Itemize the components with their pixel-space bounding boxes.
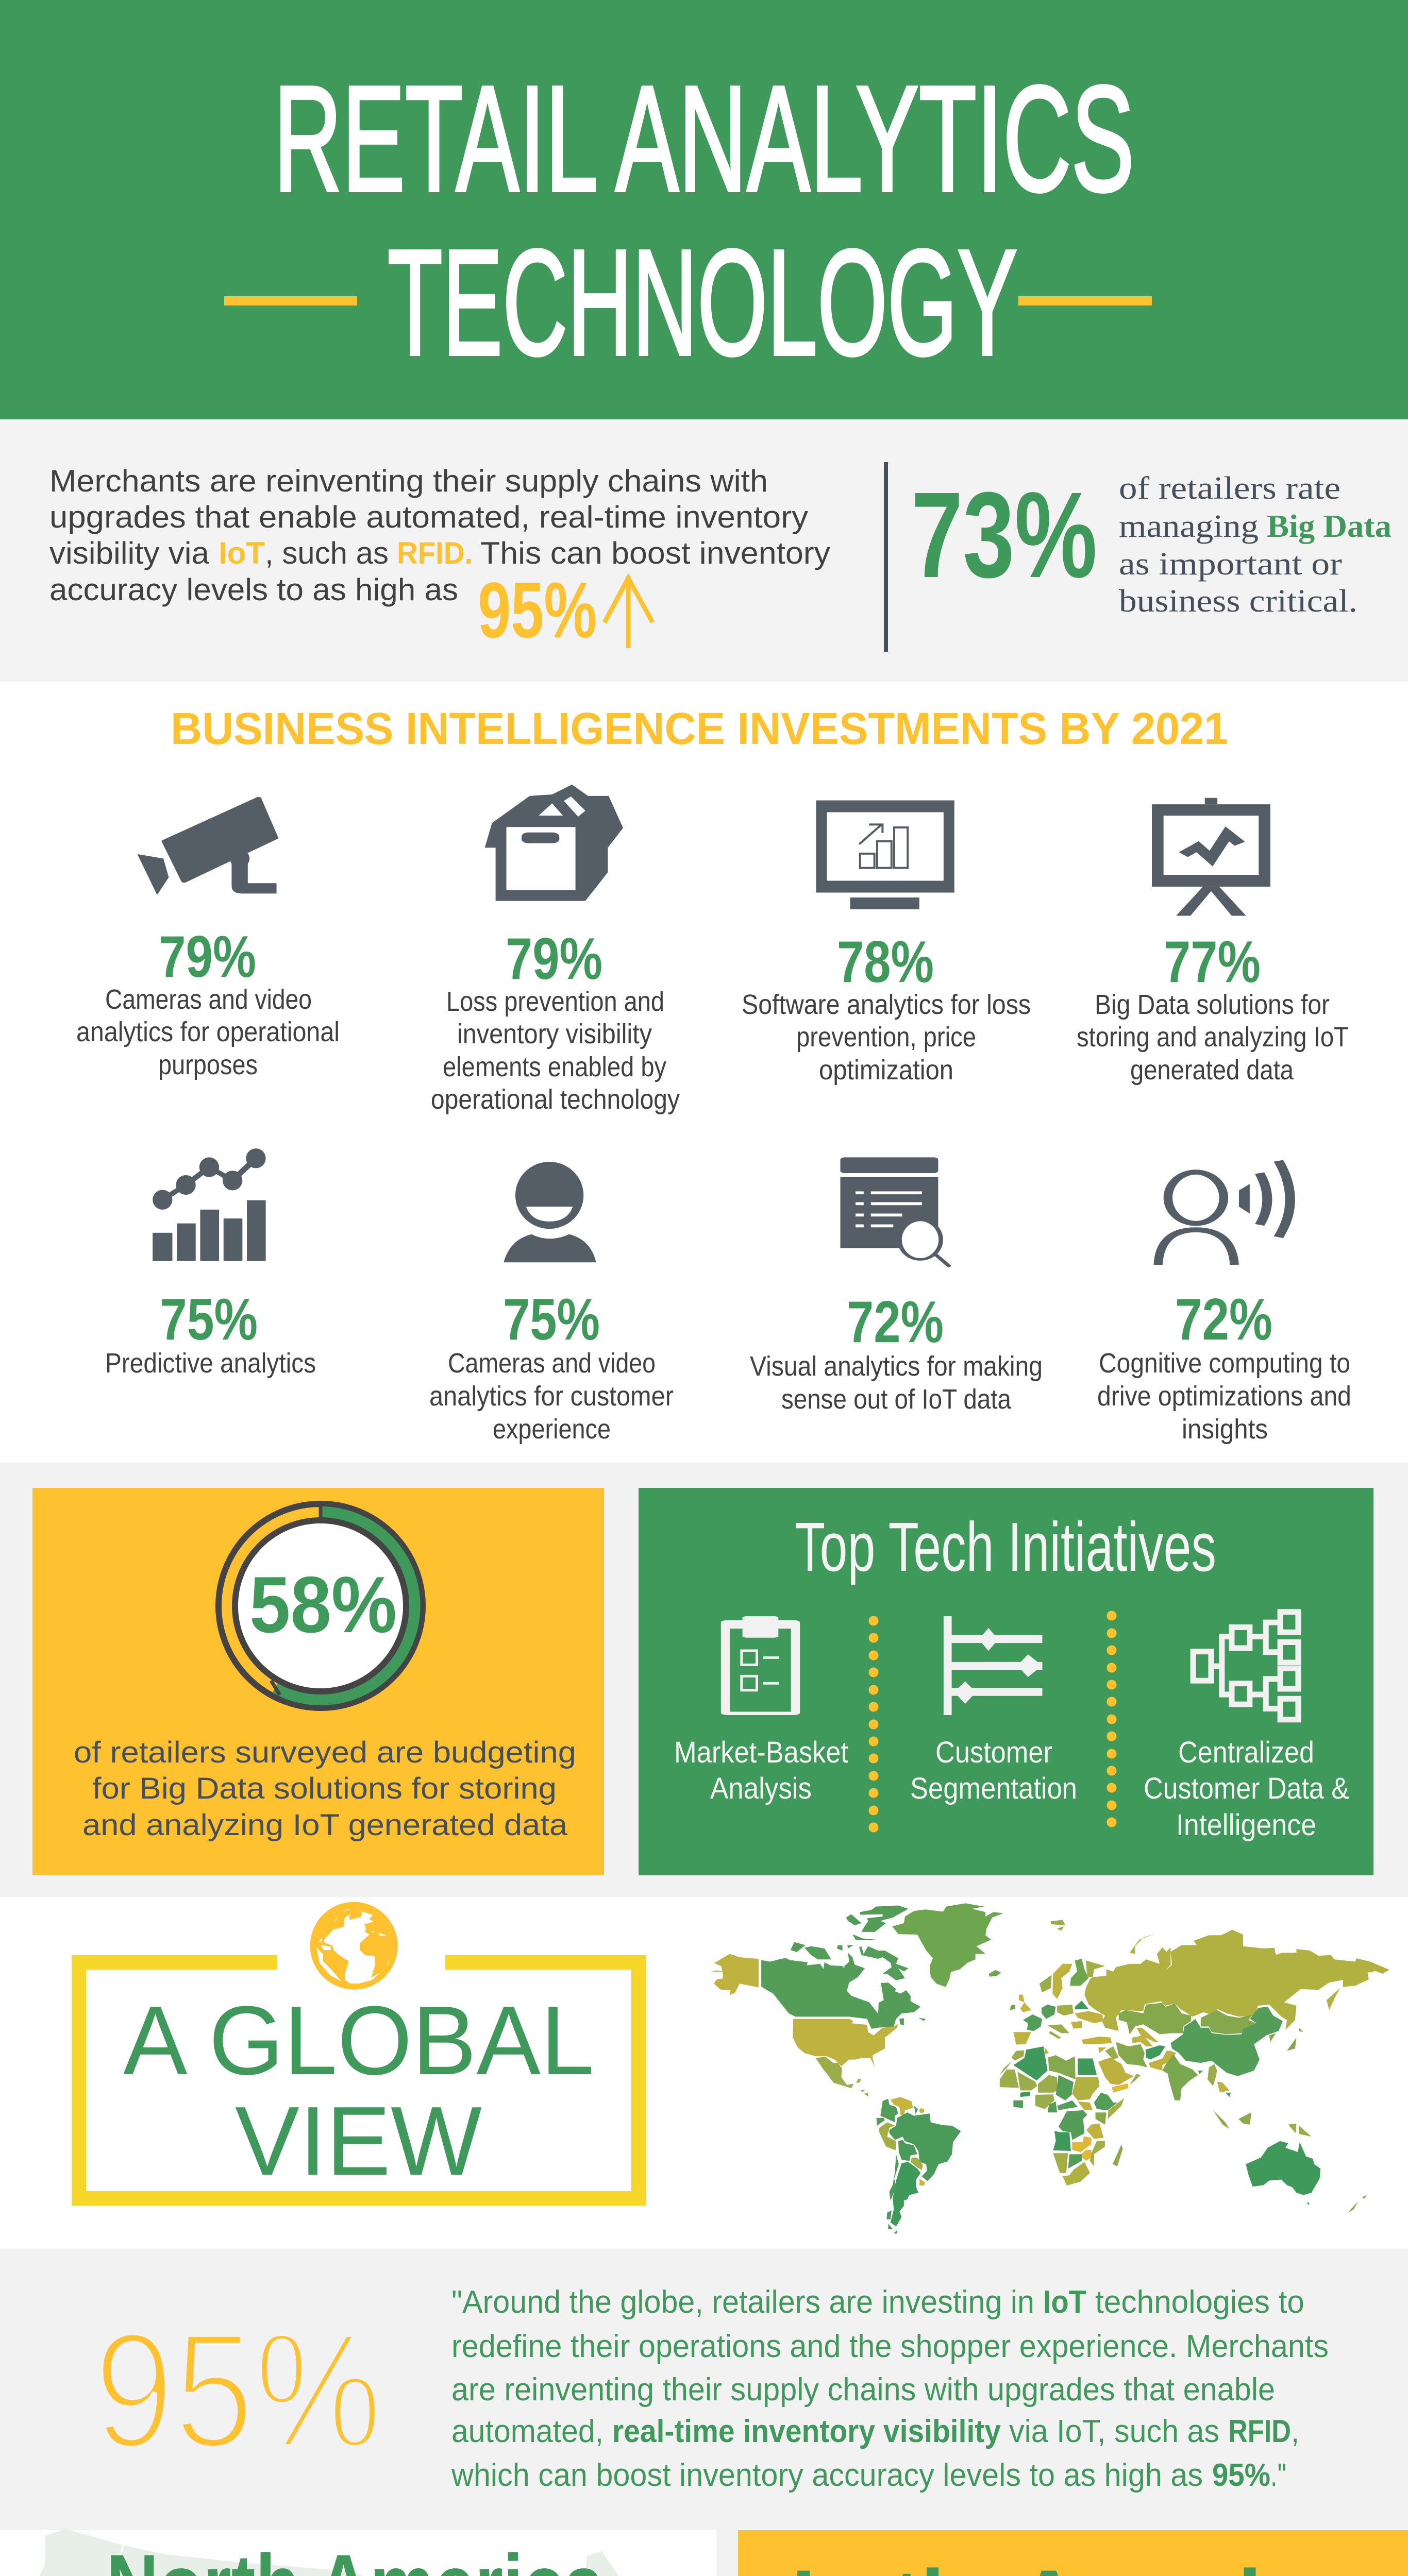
intro text: visibility via <box>49 536 210 570</box>
quote text: real-time inventory visibility <box>612 2414 1001 2449</box>
icon: monitor chart <box>816 801 954 909</box>
label: market-basket <box>674 1736 848 1805</box>
map: eurasia africa oceania <box>989 1920 1389 2213</box>
label: customer segmentation <box>910 1736 1077 1805</box>
intro text: RFID. <box>397 536 473 570</box>
stat 1: Cameras and video <box>105 984 312 1015</box>
quote text: IoT <box>1043 2284 1086 2320</box>
heading: VIEW <box>235 2087 482 2196</box>
big data text: of retailers rate <box>1119 471 1340 506</box>
stat 1: analytics for operational <box>76 1016 340 1047</box>
stat 6: 75% <box>503 1287 600 1352</box>
icon: voice cognition person <box>1158 1161 1290 1265</box>
label: customer segmentation: Segmentation <box>910 1772 1077 1805</box>
budget text: for Big Data solutions for storing <box>92 1772 557 1805</box>
heading: BUSINESS INTELLIGENCE INVESTMENTS BY 2021 <box>171 704 1228 754</box>
icon: up arrow <box>605 576 652 648</box>
intro text: This can boost inventory <box>480 536 830 570</box>
label: market-basket: Analysis <box>710 1772 812 1805</box>
big data text: as important or <box>1119 547 1342 582</box>
stat 6: experience <box>493 1414 611 1445</box>
stat 7 <box>750 1290 1043 1415</box>
label: centralized customer data: Intelligence <box>1176 1808 1316 1842</box>
big data text: Big Data <box>1267 509 1392 544</box>
big data text <box>1119 471 1392 619</box>
quote text: redefine their operations and the shopper experience. Merchants <box>451 2329 1329 2364</box>
icon: sliders <box>944 1616 1042 1715</box>
quote text: which can boost inventory accuracy levels to as high as <box>451 2458 1203 2493</box>
stat 8: Cognitive computing to <box>1099 1348 1350 1379</box>
stat 8: insights <box>1182 1414 1268 1445</box>
stat: 95%: 95% <box>478 566 597 654</box>
stat 4: Big Data solutions for <box>1095 989 1330 1020</box>
stat 3: prevention, price <box>796 1022 976 1053</box>
intro text: , such as <box>265 536 389 570</box>
icon: globe <box>310 1902 398 1990</box>
label: customer segmentation: Customer <box>935 1736 1052 1769</box>
quote text: automated, <box>451 2414 604 2449</box>
icon: presentation easel <box>1152 798 1270 916</box>
map: americas and greenland <box>711 1903 1003 2233</box>
label: centralized customer data: Centralized <box>1178 1736 1314 1769</box>
stat 3: optimization <box>819 1055 953 1086</box>
intro text: Merchants are reinventing their supply chains with <box>49 464 768 498</box>
stat 4 <box>1077 929 1349 1086</box>
title <box>274 55 1134 386</box>
panel: intro statistics <box>0 419 1408 682</box>
panel: a global view <box>0 1897 1408 2249</box>
panel: header <box>0 0 1408 419</box>
intro text: IoT <box>219 536 265 570</box>
big data text: managing <box>1119 509 1259 544</box>
label: market-basket: Market-Basket <box>674 1736 848 1769</box>
label: centralized customer data: Customer Data & <box>1144 1772 1349 1805</box>
panel: 58 percent budgeting <box>32 1488 604 1875</box>
stat 8: 72% <box>1175 1287 1272 1352</box>
panel: top tech initiatives <box>639 1488 1373 1875</box>
budget text: and analyzing IoT generated data <box>82 1808 568 1842</box>
stat: 58%: 58% <box>249 1560 397 1649</box>
stat 1 <box>76 924 340 1080</box>
stat: thin 95%: 95% <box>94 2298 382 2482</box>
yellow frame <box>79 1962 639 2198</box>
stat 7: 72% <box>847 1290 944 1355</box>
panel: north america <box>0 2529 716 2576</box>
stat 3: 78% <box>837 929 934 995</box>
stat 8 <box>1097 1287 1351 1445</box>
stat 1: 79% <box>159 924 256 990</box>
intro text: accuracy levels to as high as <box>49 572 458 607</box>
intro text <box>49 464 830 607</box>
intro text: upgrades that enable automated, real-time inventory <box>49 500 808 534</box>
map: USA background <box>14 2529 622 2576</box>
donut chart <box>219 1504 423 1708</box>
quote text <box>451 2284 1329 2493</box>
stat 2: inventory visibility <box>457 1019 652 1049</box>
quote text: RFID <box>1228 2414 1291 2449</box>
dotted divider 1 <box>869 1616 878 1832</box>
quote text: , <box>1291 2414 1299 2449</box>
quote text: 95% <box>1212 2458 1270 2493</box>
stat 2: Loss prevention and <box>446 986 664 1017</box>
panel: 95 percent quote <box>94 2284 1329 2493</box>
stat 4: 77% <box>1164 929 1261 995</box>
stat 2: 79% <box>506 926 602 992</box>
quote text: are reinventing their supply chains with upgrades that enable <box>451 2372 1275 2408</box>
quote text: technologies to <box>1095 2284 1304 2320</box>
divider <box>884 462 888 652</box>
heading <box>123 1986 594 2196</box>
stat 3 <box>742 929 1031 1086</box>
big data text: business critical. <box>1119 584 1357 619</box>
icon: clipboard <box>721 1616 800 1715</box>
stat 5 <box>105 1287 316 1379</box>
stat 3: Software analytics for loss <box>742 989 1031 1020</box>
icon: box <box>485 785 623 901</box>
stat 4: generated data <box>1130 1055 1294 1086</box>
icon: smiling customer <box>504 1162 596 1262</box>
icon: predictive chart <box>153 1148 266 1261</box>
world map <box>711 1903 1389 2233</box>
stat 2: elements enabled by <box>443 1052 666 1082</box>
yellow dash right <box>1018 296 1152 306</box>
budget text <box>74 1736 576 1842</box>
icon: security camera <box>138 799 277 895</box>
panel: latin america <box>738 2530 1408 2576</box>
stat: 73%: 73% <box>911 467 1097 603</box>
stat 6 <box>429 1287 674 1445</box>
heading: Top Tech Initiatives <box>795 1508 1216 1586</box>
budget text: of retailers surveyed are budgeting <box>74 1736 576 1769</box>
stat 2: operational technology <box>431 1084 680 1115</box>
quote text: ." <box>1270 2458 1286 2493</box>
stat 4: storing and analyzing IoT <box>1077 1022 1349 1053</box>
stat 1: purposes <box>158 1049 258 1080</box>
quote text: via IoT, such as <box>1009 2414 1219 2449</box>
stat 8: drive optimizations and <box>1097 1381 1351 1412</box>
stat 6: Cameras and video <box>448 1348 656 1379</box>
icon: document magnifier <box>841 1157 950 1267</box>
heading: A GLOBAL <box>123 1986 594 2095</box>
stat 2 <box>431 926 680 1115</box>
label: centralized customer data <box>1144 1736 1349 1842</box>
icon: hierarchy tree <box>1193 1612 1298 1720</box>
dotted divider 2 <box>1107 1611 1116 1827</box>
stat 5: Predictive analytics <box>105 1348 316 1379</box>
yellow dash left <box>224 296 357 306</box>
stat 7: Visual analytics for making <box>750 1351 1043 1382</box>
stat 6: analytics for customer <box>429 1381 674 1412</box>
stat 5: 75% <box>160 1287 258 1352</box>
stat 7: sense out of IoT data <box>781 1384 1012 1415</box>
panel: business intelligence investments <box>0 682 1408 1463</box>
quote text: "Around the globe, retailers are investing in <box>451 2284 1034 2320</box>
